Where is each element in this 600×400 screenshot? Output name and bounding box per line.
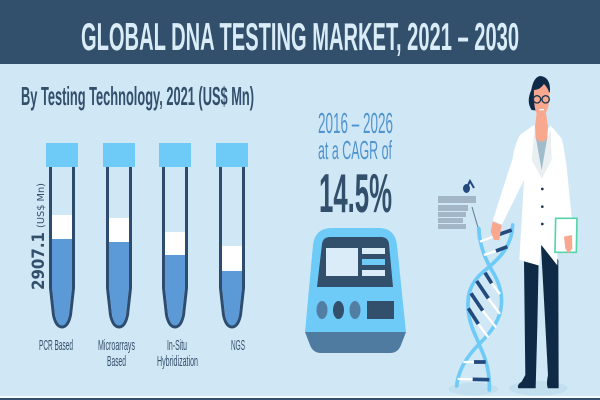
tube label: In-Situ Hybridization — [157, 337, 198, 370]
unit label: US$ Mn: (US$ Mn) — [36, 183, 47, 228]
tube label: Microarrays Based: Based — [107, 353, 126, 370]
coat buttons — [541, 188, 544, 225]
shirt — [536, 137, 547, 171]
floor shadow — [509, 381, 568, 396]
infographic canvas: 2016 – 2026 — [318, 108, 393, 140]
tube label: In-Situ Hybridization: In-Situ — [167, 337, 187, 354]
tube label: Microarrays Based — [98, 337, 135, 370]
lab coat — [493, 125, 574, 266]
left hand — [491, 222, 502, 240]
coat collar — [532, 126, 552, 179]
infographic canvas: Microarrays — [98, 337, 135, 354]
icon: small molecule — [464, 181, 474, 192]
infographic canvas: 14.5% — [319, 162, 392, 224]
glasses — [533, 96, 549, 103]
infographic canvas: at a CAGR of — [318, 135, 392, 165]
icon: testing machine — [305, 228, 406, 353]
infographic canvas: By Testing Technology, 2021 (US$ Mn) — [21, 81, 254, 111]
test tube: NGS — [216, 143, 248, 327]
infographic canvas: NGS — [231, 337, 245, 354]
value label: 2907.1: 2907.1 — [29, 232, 48, 290]
test tube: PCR Based — [46, 143, 78, 327]
bottom rule — [0, 396, 600, 400]
neck — [535, 113, 548, 142]
infographic canvas: PCR Based — [39, 337, 73, 354]
DNA helix — [448, 225, 513, 395]
scientist — [479, 76, 577, 396]
pointer line — [472, 207, 479, 231]
CAGR period text — [318, 108, 393, 165]
pipette holder — [474, 230, 484, 238]
clipboard — [555, 218, 577, 252]
test tube: Microarrays Based — [103, 143, 135, 327]
right hand — [564, 235, 572, 254]
header band — [0, 0, 600, 64]
face — [534, 84, 549, 116]
infographic canvas: Hybridization — [157, 353, 198, 370]
mouth — [539, 109, 544, 110]
test tube: In-Situ Hybridization — [159, 143, 191, 327]
trousers and shoes — [518, 240, 559, 388]
data list bars — [438, 196, 476, 229]
hair back — [529, 76, 550, 111]
